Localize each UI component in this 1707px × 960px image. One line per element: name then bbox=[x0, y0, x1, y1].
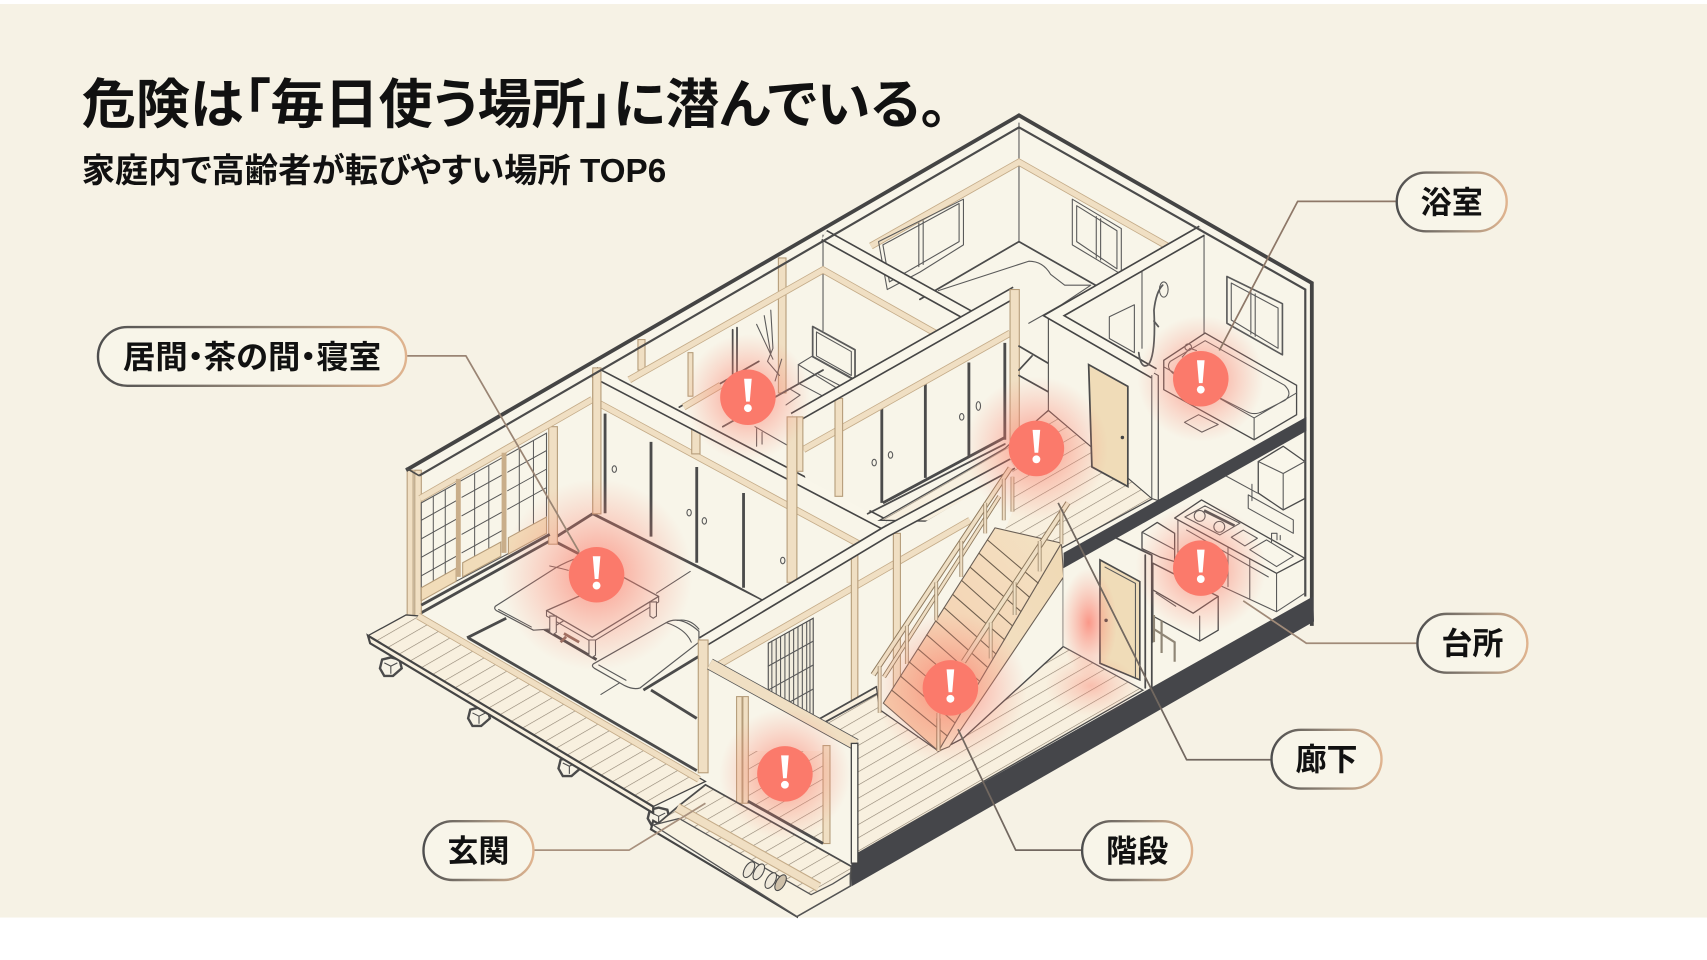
subtitle: 家庭内で高齢者が転びやすい場所 TOP6 bbox=[82, 151, 666, 190]
house illustration bbox=[368, 113, 1314, 916]
label: entrance: 玄関 bbox=[447, 834, 509, 869]
bathtub bbox=[1164, 333, 1297, 440]
label: stairs bbox=[1082, 821, 1192, 880]
alarm marker: corridor bbox=[1009, 421, 1064, 476]
back room bbox=[871, 123, 1167, 323]
staircase bbox=[873, 468, 1068, 751]
handrails bbox=[873, 468, 1068, 751]
label: kitchen: 台所 bbox=[1441, 627, 1503, 662]
shoji grid bbox=[421, 441, 547, 588]
floor slab upper bbox=[1064, 417, 1306, 568]
label: bathroom: 浴室 bbox=[1421, 185, 1483, 220]
fusuma wall, big room bbox=[600, 374, 887, 600]
fridge bbox=[1142, 522, 1175, 562]
living room with TV bbox=[629, 235, 935, 446]
house base bbox=[368, 113, 1314, 916]
danger glows bbox=[501, 316, 1266, 839]
inner wall between back rooms bbox=[824, 235, 971, 317]
partition wall B with closet doors bbox=[787, 290, 1051, 582]
door upper bbox=[1089, 365, 1128, 487]
lower hall floor bbox=[818, 647, 1143, 853]
label: bathroom bbox=[1397, 173, 1507, 231]
deck feet bbox=[380, 657, 670, 826]
porch deck bbox=[651, 785, 851, 916]
alarm marker: entrance bbox=[757, 746, 813, 802]
upper cabinet bbox=[1258, 446, 1305, 510]
label: kitchen bbox=[1417, 614, 1527, 673]
TV bbox=[798, 327, 855, 396]
slippers bbox=[741, 860, 789, 892]
dining counter and chair bbox=[1153, 563, 1218, 641]
low desk bbox=[723, 389, 800, 446]
engawa deck bbox=[368, 615, 705, 826]
title: 危険は「毎日使う場所」に潜んでいる。 bbox=[82, 76, 947, 135]
lattice window bbox=[768, 618, 813, 739]
partition wall A bbox=[593, 368, 885, 525]
futon right bbox=[592, 620, 699, 689]
tea table bbox=[547, 577, 659, 637]
bath window bbox=[1227, 276, 1282, 355]
futon and table bbox=[495, 557, 699, 689]
stair side panel bbox=[943, 577, 1063, 749]
treads bbox=[883, 528, 1061, 751]
alarm marker: kitchen bbox=[1173, 540, 1229, 596]
alarm marker: bedroom bbox=[720, 370, 776, 425]
label: entrance bbox=[423, 821, 533, 880]
big tatami room floor bbox=[421, 514, 882, 781]
alarm marker: bathroom bbox=[1173, 351, 1229, 407]
counter bbox=[1178, 520, 1305, 612]
label: corridor bbox=[1272, 730, 1381, 789]
label: stairs: 階段 bbox=[1106, 834, 1168, 869]
alarm marker: stairs bbox=[923, 660, 978, 716]
bath mat bbox=[1184, 415, 1218, 432]
lower room wall and door bbox=[1063, 538, 1152, 690]
futon left bbox=[495, 557, 610, 630]
label: living room bbox=[98, 327, 406, 386]
outer roofline wall bbox=[406, 115, 1312, 626]
entrance wall and porch bbox=[651, 640, 858, 916]
bathroom walls bbox=[1048, 227, 1306, 501]
foundation band bbox=[851, 596, 1314, 887]
alarm marker: living room bbox=[569, 547, 624, 602]
stair wall C bbox=[702, 464, 1012, 762]
label: living room: 居間・茶の間・寝室 bbox=[123, 339, 381, 375]
label: corridor: 廊下 bbox=[1295, 743, 1358, 778]
shower bbox=[1109, 282, 1168, 366]
upper corridor floor bbox=[880, 410, 1153, 577]
leader lines bbox=[407, 201, 1416, 850]
range window bbox=[1248, 495, 1293, 533]
kitchen bbox=[1142, 446, 1305, 662]
curtain bbox=[757, 310, 782, 381]
left wall with shoji bbox=[407, 370, 601, 616]
